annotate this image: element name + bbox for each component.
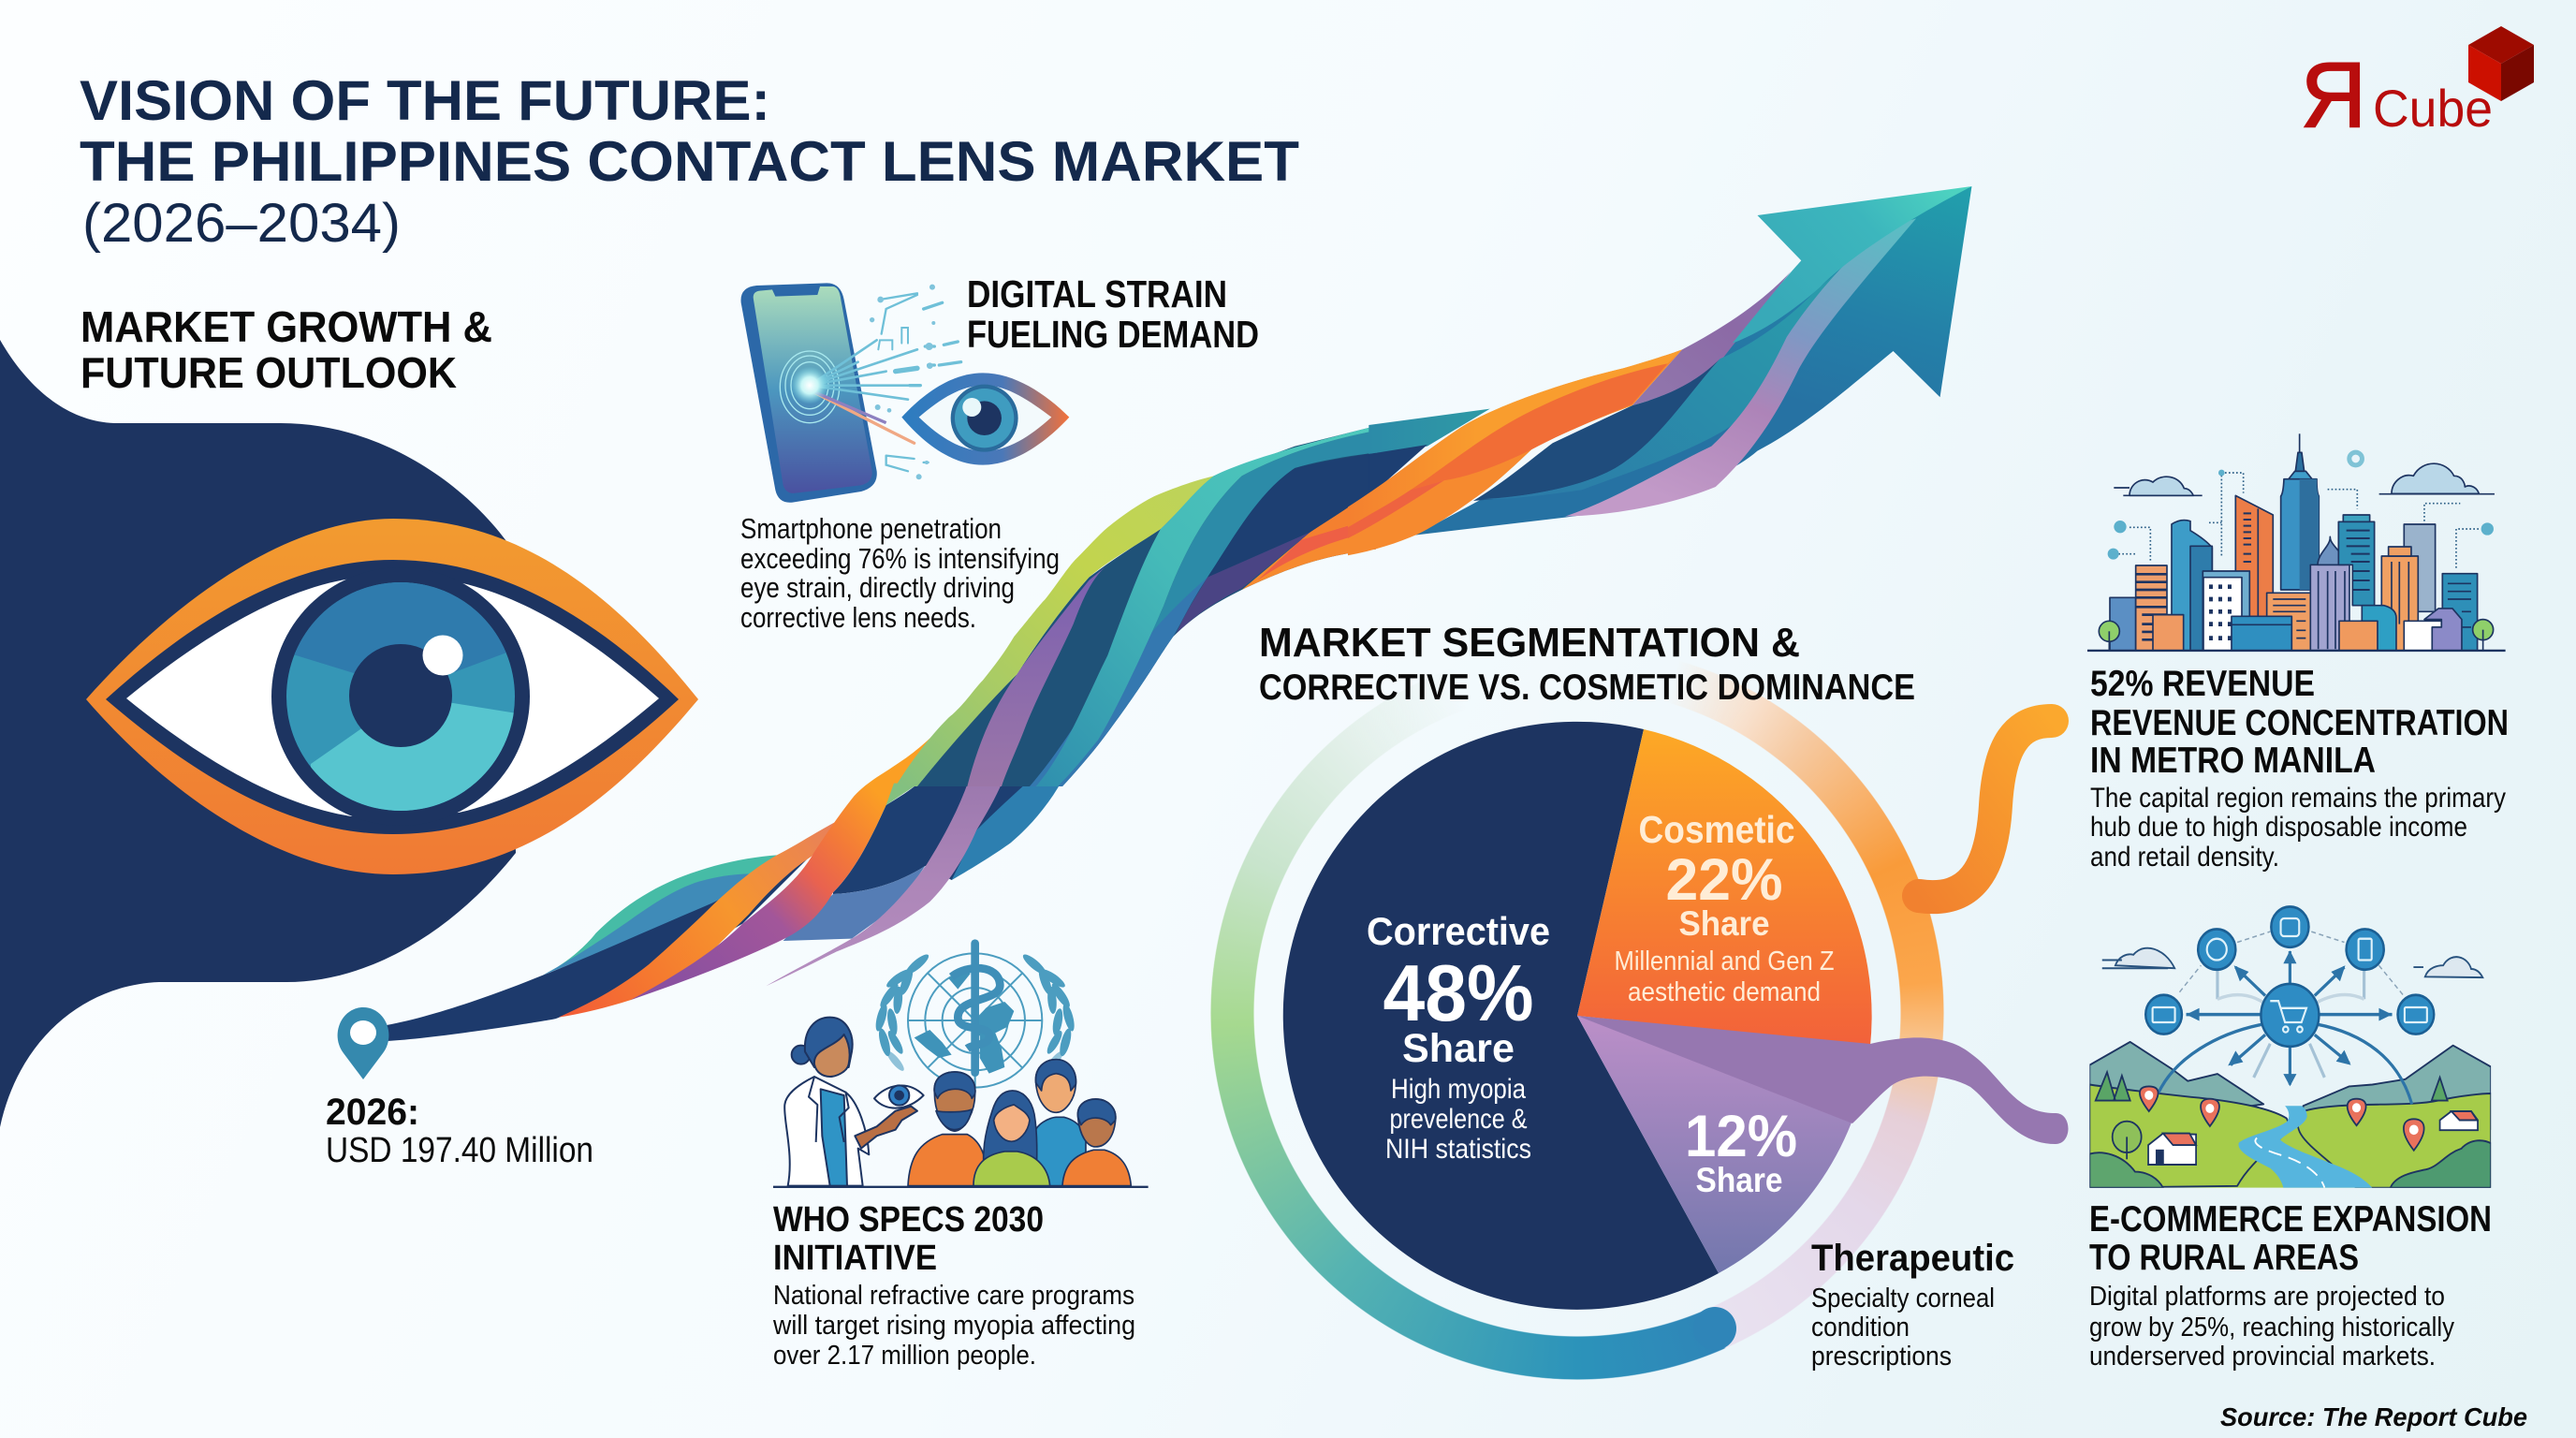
- heading: digital strain: FUELING DEMAND: [967, 313, 1259, 356]
- patients: [908, 1060, 1131, 1186]
- label: cosmetic slice: Share: [1679, 904, 1769, 943]
- landscape: [2089, 1042, 2491, 1188]
- label: therapeutic slice: 12%: [1685, 1104, 1797, 1169]
- label: cosmetic slice: [1614, 808, 1835, 1007]
- text: digital strain description: corrective lens needs.: [740, 601, 976, 634]
- chart: market share pie: [1283, 721, 2069, 1350]
- ring: gradient ring around the pie chart: [1210, 646, 1944, 1380]
- icon: e-commerce reaching rural landscape: [2089, 906, 2491, 1188]
- text: WHO SPECS 2030 initiative: over 2.17 million people.: [773, 1341, 1036, 1371]
- text: WHO SPECS 2030 initiative: National refractive care programs: [773, 1281, 1134, 1311]
- text: therapeutic description: condition: [1811, 1313, 1910, 1343]
- heading: market growth and future outlook: FUTURE OUTLOOK: [80, 348, 457, 397]
- connector: cosmetic to Metro Manila: [1919, 721, 2052, 897]
- heading: market segmentation: [1259, 620, 1915, 708]
- label: corrective slice: Corrective: [1367, 909, 1550, 953]
- text: e-commerce expansion: Digital platforms are projected to: [2089, 1282, 2445, 1312]
- label: corrective slice: High myopia: [1391, 1074, 1526, 1105]
- arrow: rising multicolour growth ribbon: [387, 186, 1971, 1041]
- shape: navy background swoosh: [0, 340, 516, 1127]
- text: e-commerce expansion: E-COMMERCE EXPANSION: [2089, 1199, 2492, 1240]
- logo: R Cube: [2301, 26, 2534, 146]
- label: cosmetic slice: aesthetic demand: [1628, 977, 1821, 1007]
- slice: cosmetic: [1577, 729, 1872, 1046]
- title: [80, 69, 1299, 254]
- label: corrective slice: [1367, 909, 1550, 1165]
- label: cosmetic slice: Cosmetic: [1638, 808, 1795, 851]
- arrows and hub: [2159, 951, 2412, 1104]
- heading: digital strain: DIGITAL STRAIN: [967, 272, 1227, 315]
- text: therapeutic description: [1811, 1238, 2014, 1372]
- map pins: [2140, 1086, 2424, 1151]
- text: e-commerce expansion: TO RURAL AREAS: [2089, 1238, 2359, 1278]
- clouds: [2115, 948, 2482, 977]
- heading: market growth and future outlook: MARKET GROWTH &: [80, 302, 492, 351]
- text: therapeutic description: prescriptions: [1811, 1342, 1952, 1372]
- label: therapeutic slice: [1685, 1104, 1797, 1199]
- text: WHO SPECS 2030 initiative: WHO SPECS 2030: [773, 1200, 1044, 1240]
- text: Metro Manila revenue: 52% REVENUE: [2090, 664, 2315, 704]
- ribbon section: upper shaft and arrow head: [1348, 186, 1971, 555]
- buildings: [2110, 433, 2478, 651]
- text: Metro Manila revenue: and retail density.: [2090, 842, 2279, 873]
- text: digital strain description: Smartphone penetration: [740, 512, 1002, 545]
- clouds: [2130, 463, 2479, 495]
- ribbon section: middle rise: [896, 426, 1376, 786]
- text: therapeutic description: Specialty corneal: [1811, 1284, 1995, 1313]
- icon: large eye: [86, 519, 698, 874]
- text: WHO SPECS 2030 initiative: will target rising myopia affecting: [772, 1311, 1135, 1341]
- WHO emblem: [873, 939, 1076, 1088]
- ribbon section: lower tail: [387, 713, 1062, 1041]
- label: cosmetic slice: Millennial and Gen Z: [1614, 946, 1835, 976]
- label: 2026 market value: USD 197.40 Million: [326, 1131, 593, 1170]
- heading: market segmentation: CORRECTIVE VS. COSMETIC DOMINANCE: [1259, 668, 1915, 708]
- text: Metro Manila revenue: [2090, 664, 2509, 873]
- small eye: [901, 373, 1069, 465]
- title: VISION OF THE FUTURE:: [80, 69, 770, 132]
- heading: digital strain: [967, 272, 1259, 356]
- slice: corrective: [1283, 722, 1719, 1310]
- icon: city skyline: [2087, 433, 2506, 651]
- source note: Source: The Report Cube: [2220, 1402, 2527, 1431]
- text: e-commerce expansion: grow by 25%, reaching historically: [2089, 1313, 2454, 1343]
- text: therapeutic description: Therapeutic: [1811, 1238, 2014, 1279]
- text: Metro Manila revenue: The capital region remains the primary: [2090, 783, 2506, 814]
- title: (2026–2034): [82, 193, 401, 254]
- text: WHO SPECS 2030 initiative: [772, 1200, 1135, 1371]
- ring end cap: [1693, 1307, 1736, 1350]
- trees: [2099, 620, 2494, 651]
- text: Metro Manila revenue: hub due to high disposable income: [2090, 812, 2467, 843]
- houses and trees: [2096, 1072, 2478, 1165]
- label: 2026 market value: 2026:: [326, 1092, 419, 1133]
- text: e-commerce expansion: underserved provincial markets.: [2089, 1342, 2436, 1372]
- text: digital strain description: eye strain, directly driving: [740, 571, 1015, 604]
- label: 2026 market value: [326, 1092, 593, 1170]
- icon: map pin for 2026: [338, 1007, 388, 1079]
- label: corrective slice: NIH statistics: [1385, 1134, 1531, 1165]
- logo: R Cube: Я: [2301, 43, 2366, 146]
- label: corrective slice: 48%: [1383, 949, 1533, 1038]
- doctor: [784, 1018, 924, 1186]
- label: corrective slice: prevelence &: [1389, 1104, 1528, 1135]
- text: Metro Manila revenue: IN METRO MANILA: [2090, 741, 2376, 781]
- label: corrective slice: Share: [1402, 1026, 1515, 1071]
- text: e-commerce expansion: [2089, 1199, 2492, 1372]
- heading: market growth and future outlook: [80, 302, 492, 397]
- logo: R Cube: Cube: [2373, 79, 2493, 138]
- label: cosmetic slice: 22%: [1666, 847, 1782, 913]
- slice: therapeutic: [1577, 1016, 1870, 1273]
- text: digital strain description: exceeding 76% is intensifying: [740, 542, 1060, 575]
- text: digital strain description: [740, 512, 1060, 634]
- slice connector band: therapeutic to e-commerce: [1577, 1016, 2069, 1144]
- label: therapeutic slice: Share: [1696, 1161, 1782, 1199]
- text: WHO SPECS 2030 initiative: INITIATIVE: [773, 1239, 937, 1278]
- heading: market segmentation: MARKET SEGMENTATION &: [1259, 620, 1800, 666]
- icon: phone emitting light toward eye: [741, 283, 1069, 503]
- icon: WHO emblem with doctor and patients: [773, 939, 1149, 1188]
- title: THE PHILIPPINES CONTACT LENS MARKET: [80, 130, 1299, 193]
